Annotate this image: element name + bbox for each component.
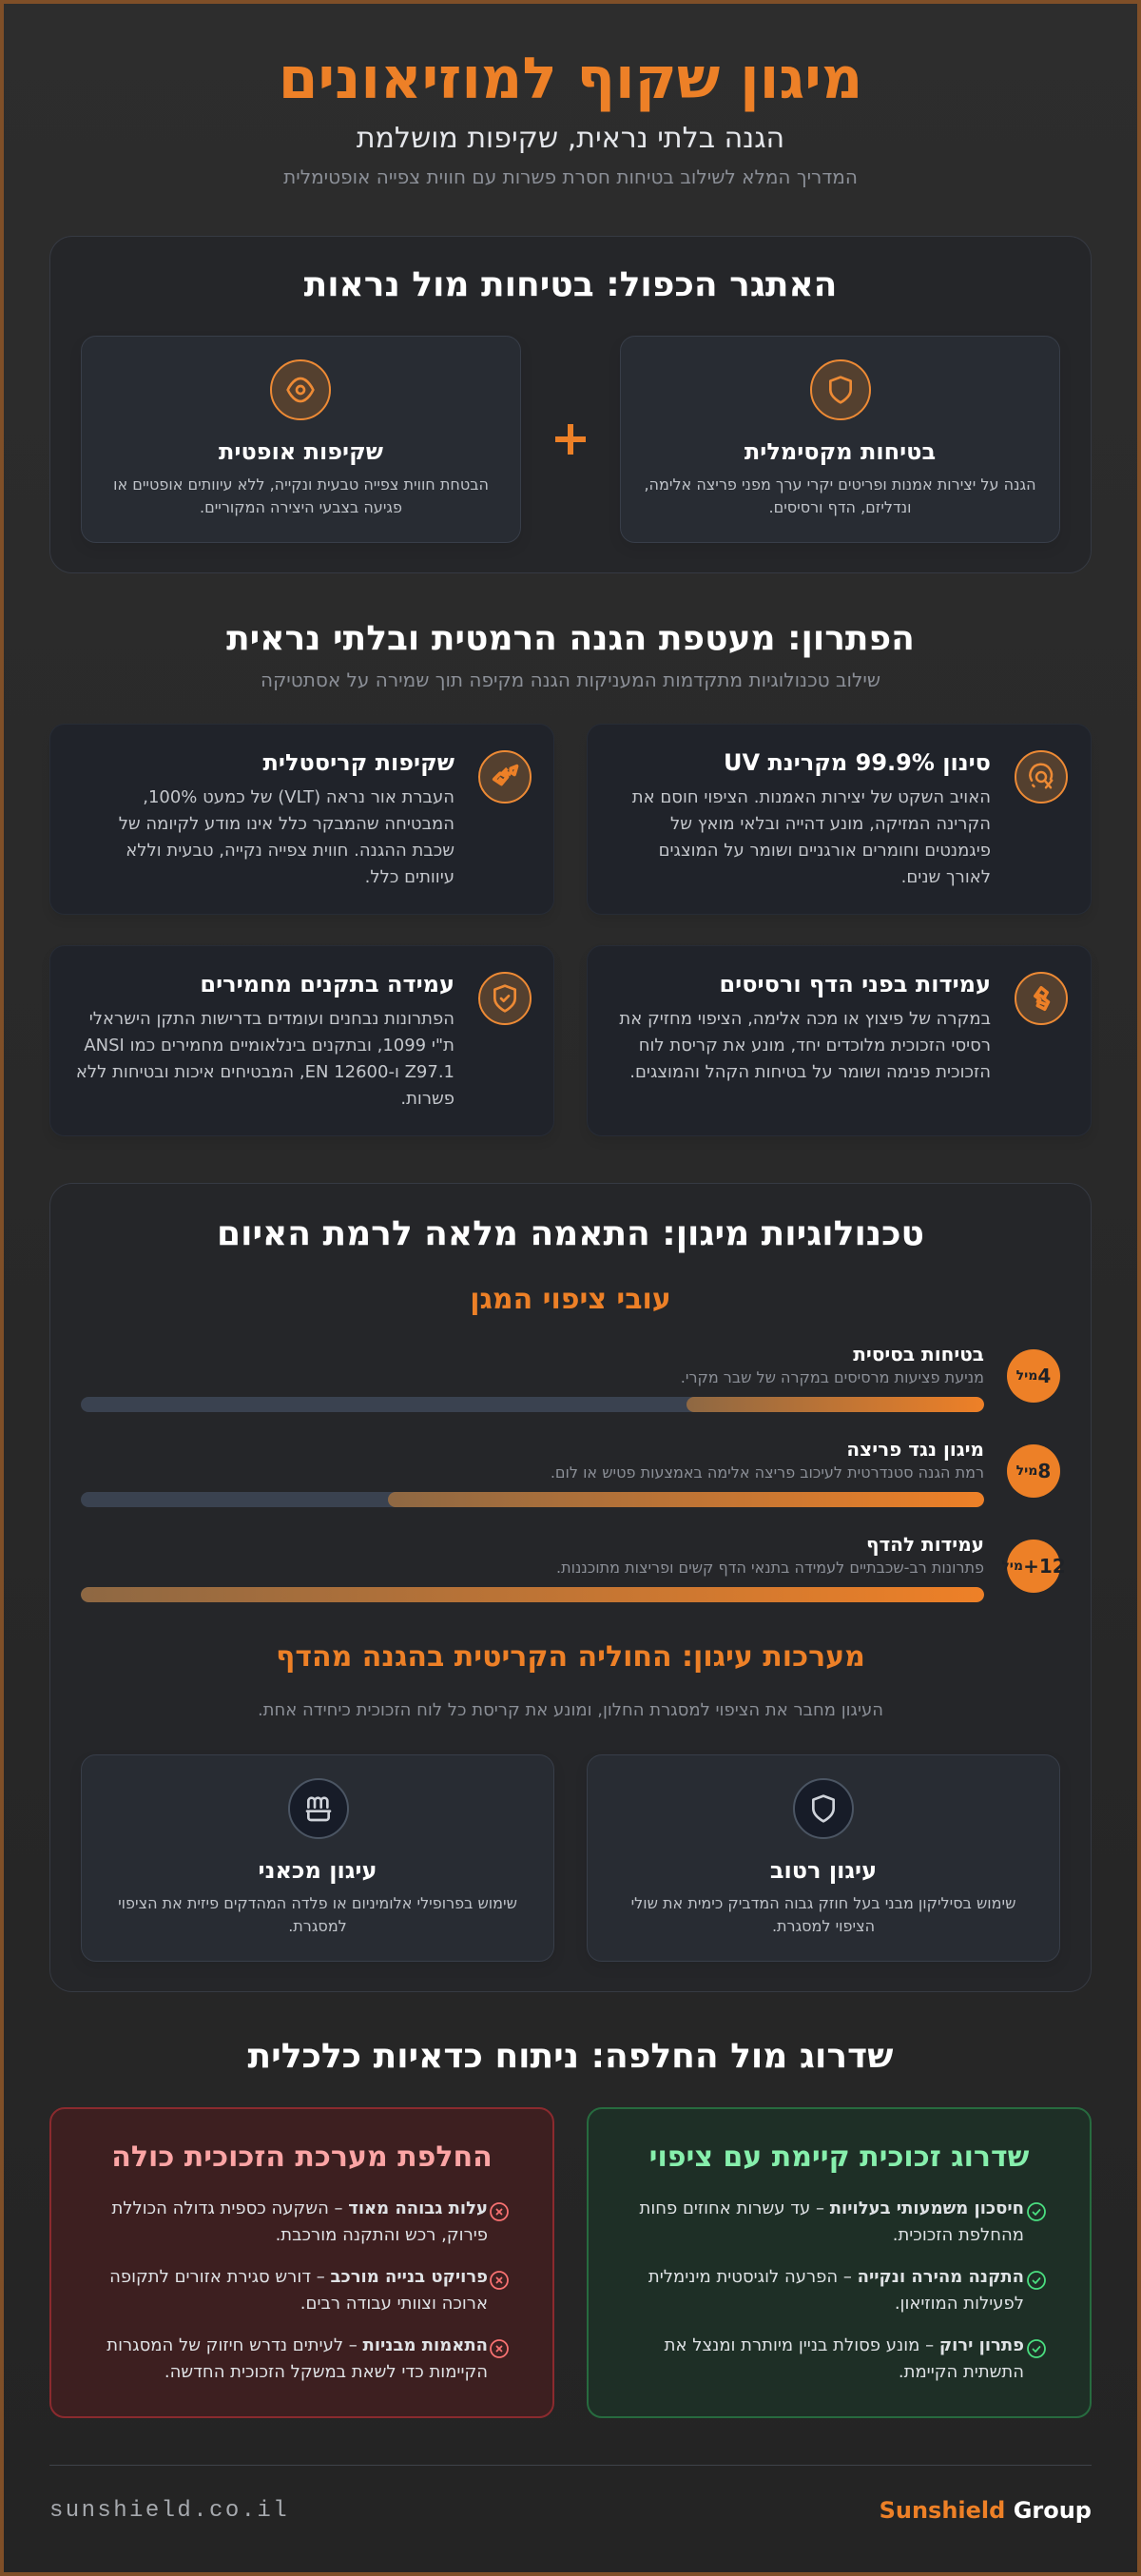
card title: שקיפות קריסטלית: [262, 749, 454, 776]
card text: הבטחת חווית צפייה טבעית ונקייה, ללא עיוותים אופטיים או: [113, 475, 489, 494]
row text: רמת הגנה סטנדרטית לעיכוב פריצה אלימה באמצעות פטיש או לום.: [551, 1463, 984, 1482]
card title: עיגון מכאני: [259, 1857, 377, 1884]
badge: מיל: [1016, 1368, 1037, 1384]
row text: מניעת פציעות מרסיסים במקרה של שבר מקרי.: [681, 1368, 984, 1386]
card: UV filter: [587, 724, 1092, 915]
card text: עיוותים כלל.: [365, 867, 454, 887]
row: 4 mil: [81, 1343, 1060, 1412]
item text: מהחלפת הזכוכית.: [893, 2225, 1024, 2245]
anchoring text: העיגון מחבר את הציפוי למסגרת החלון, ומונע את קריסת כל לוח הזכוכית כיחידה אחת.: [258, 1700, 883, 1720]
solution subtitle: שילוב טכנולוגיות מתקדמות המעניקות הגנה מקיפה תוך שמירה על אסתטיקה: [261, 668, 880, 691]
bar 100%: [81, 1587, 984, 1602]
heading: upgrade vs replace: שדרוג מול החלפה: ניתוח כדאיות כלכלית: [248, 2037, 893, 2076]
icon: shield: [793, 1778, 854, 1839]
panel: double challenge: [49, 236, 1092, 573]
list item: [664, 2335, 1046, 2382]
card text: שימוש בסיליקון מבני בעל חוזק גבוה המדביק כימית את שולי: [631, 1894, 1015, 1912]
icon: check: [1027, 2271, 1046, 2290]
card: optical clarity: [81, 336, 521, 543]
badge: [1007, 1444, 1060, 1498]
badge: [1007, 1540, 1060, 1593]
badge: מיל: [1016, 1463, 1037, 1479]
heading: anchoring: מערכות עיגון: החוליה הקריטית בהגנה מהדף: [276, 1640, 865, 1674]
row: 12+ mil: [81, 1533, 1066, 1602]
heading: double challenge: האתגר הכפול: בטיחות מול נראות: [304, 265, 837, 304]
tagline: המדריך המלא לשילוב בטיחות חסרת פשרות עם חווית צפייה אופטימלית: [283, 165, 858, 188]
card text: [631, 787, 991, 887]
card text: לאורך שנים.: [901, 867, 991, 887]
icon: UV: [1015, 750, 1068, 804]
badge: מיל: [1001, 1559, 1023, 1574]
card title: עמידה בתקנים מחמירים: [200, 971, 454, 997]
card text: ת"י 1099, ובתקנים בינלאומיים מחמירים כמו ANSI: [84, 1036, 454, 1056]
card text: [113, 475, 489, 516]
card text: שכבת ההגנה. חווית צפייה נקייה, טבעית וללא: [126, 841, 454, 861]
list item: [109, 2267, 509, 2314]
badge: [1007, 1349, 1060, 1403]
card text: פשרות.: [400, 1089, 454, 1109]
footer url: sunshield.co.il: [49, 2498, 289, 2524]
card text: למסגרת.: [288, 1917, 347, 1935]
card text: [644, 475, 1036, 516]
card: crystal clarity: [49, 724, 554, 915]
card text: פיגמנטים וחומרים אורגניים ושומר על המוצגים: [659, 841, 991, 861]
card text: [631, 1894, 1015, 1935]
row title: בטיחות בסיסית: [853, 1343, 984, 1365]
card text: [619, 1009, 991, 1082]
card text: פגיעה בצבעי היצירה המקוריים.: [200, 498, 402, 516]
bar 66%: [81, 1492, 984, 1507]
icon: clarity: [478, 750, 532, 804]
badge: 4: [1037, 1365, 1051, 1387]
row title: מיגון נגד פריצה: [846, 1438, 984, 1461]
card text: האויב השקט של יצירות האמנות. הציפוי חוסם את: [632, 787, 991, 807]
icon: shield check: [478, 972, 532, 1025]
card: wet anchoring: [587, 1754, 1060, 1962]
badge: 12+: [1023, 1555, 1066, 1578]
title: מיגון שקוף למוזיאונים: [279, 46, 862, 112]
subtitle: הגנה בלתי נראית, שקיפות מושלמת: [357, 122, 784, 155]
row: 8 mil: [81, 1438, 1060, 1507]
panel title: החלפת מערכת הזכוכית כולה: [111, 2140, 493, 2174]
icon: shield: [810, 359, 871, 420]
bar 33%: [81, 1397, 984, 1412]
item text: פתרון ירוק – מונע פסולת בניין מיותרת ומנצל את: [665, 2335, 1024, 2355]
card text: [119, 787, 454, 887]
item text: [106, 2335, 488, 2382]
panel title: שדרוג זכוכית קיימת עם ציפוי: [649, 2140, 1029, 2174]
card: strict standards: [49, 945, 554, 1136]
icon: cross: [490, 2271, 509, 2290]
card text: ונדליזם, הדף ורסיסים.: [768, 498, 912, 516]
card text: הקרינה המזיקה, מונע דהייה ובלאי מואץ של: [670, 814, 991, 834]
badge: 8: [1037, 1460, 1051, 1482]
item text: התשתית הקיימת.: [899, 2362, 1024, 2382]
icon: cross: [490, 2202, 509, 2221]
item text: חיסכון משמעותי בעלויות – עד עשרות אחוזים פחות: [639, 2198, 1024, 2218]
item text: פרויקט בנייה מורכב – דורש סגירת אזורים לתקופה: [109, 2267, 488, 2287]
item text: [639, 2198, 1024, 2245]
item text: הקיימות כדי לשאת במשקל הזכוכית החדשה.: [164, 2362, 488, 2382]
item text: התקנה מהירה ונקייה – הפרעה לוגיסטית מינימלית: [648, 2267, 1024, 2287]
row text: פתרונות רב-שכבתיים לעמידה בתנאי הדף קשים ופריצות מתוכננות.: [556, 1559, 984, 1577]
plus sign: [555, 424, 586, 455]
item text: לפעילות המוזיאון.: [895, 2294, 1024, 2314]
card title: בטיחות מקסימלית: [745, 438, 936, 465]
card text: [118, 1894, 517, 1935]
list item: [106, 2335, 509, 2382]
card text: הזכוכית פנימה ושומר על בטיחות הקהל והמוצגים.: [629, 1062, 991, 1082]
panel: replace: [49, 2107, 554, 2418]
icon: eye: [270, 359, 331, 420]
item text: [648, 2267, 1024, 2314]
item text: [664, 2335, 1024, 2382]
card title: עמידות בפני הדף ורסיסים: [719, 971, 991, 997]
heading: solution: הפתרון: מעטפת הגנה הרמטית ובלתי נראית: [226, 619, 915, 658]
card title: עיגון רטוב: [770, 1857, 877, 1884]
item text: [111, 2198, 488, 2245]
card title: שקיפות אופטית: [219, 438, 383, 465]
card text: Z97.1 ו-EN 12600, המבטיחים איכות ובטיחות ללא: [76, 1062, 454, 1082]
list item: [648, 2267, 1046, 2314]
item text: [109, 2267, 488, 2314]
icon: clamp: [288, 1778, 349, 1839]
card text: במקרה של פיצוץ או מכה אלימה, הציפוי מחזיק את: [619, 1009, 991, 1029]
card text: הגנה על יצירות אמנות ופריטים יקרי ערך מפני פריצה אלימה,: [644, 475, 1036, 494]
card: blast resistance: [587, 945, 1092, 1136]
list item: [111, 2198, 509, 2245]
card: mechanical anchoring: [81, 1754, 554, 1962]
panel: upgrade: [587, 2107, 1092, 2418]
heading: technologies: טכנולוגיות מיגון: התאמה מלאה לרמת האיום: [217, 1214, 924, 1253]
icon: check: [1027, 2202, 1046, 2221]
footer brand: Sunshield Group: [880, 2497, 1092, 2524]
icon: shards: [1015, 972, 1068, 1025]
row title: עמידות להדף: [866, 1533, 984, 1556]
card text: הציפוי למסגרת.: [772, 1917, 875, 1935]
list item: [639, 2198, 1046, 2245]
panel: technologies: [49, 1183, 1092, 1992]
heading: coating thickness: עובי ציפוי המגן: [470, 1283, 671, 1316]
item text: התאמות מבניות – לעיתים נדרש חיזוק של המסגרות: [106, 2335, 488, 2355]
card text: המבטיחה שהמבקר כלל אינו מודע לקיומה של: [119, 814, 454, 834]
icon: cross: [490, 2339, 509, 2358]
card: maximum safety: [620, 336, 1060, 543]
card text: [76, 1009, 454, 1109]
icon: check: [1027, 2339, 1046, 2358]
card text: רסיסי הזכוכית מלוכדים יחד, מונע את קריסת לוח: [639, 1036, 991, 1056]
card title: סינון 99.9% מקרינת UV: [724, 749, 991, 776]
card text: הפתרונות נבחנים ועומדים בדרישות התקן הישראלי: [89, 1009, 454, 1029]
item text: עלות גבוהה מאוד – השקעה כספית גדולה הכוללת: [111, 2198, 488, 2218]
card text: העברת אור נראה (VLT) של כמעט 100%,: [143, 787, 454, 807]
item text: ארוכה וצוותי עבודה רבים.: [300, 2294, 488, 2314]
item text: פירוק, רכש והתקנה מורכבת.: [276, 2225, 488, 2245]
card text: שימוש בפרופילי אלומיניום או פלדה המהדקים פיזית את הציפוי: [118, 1894, 517, 1912]
